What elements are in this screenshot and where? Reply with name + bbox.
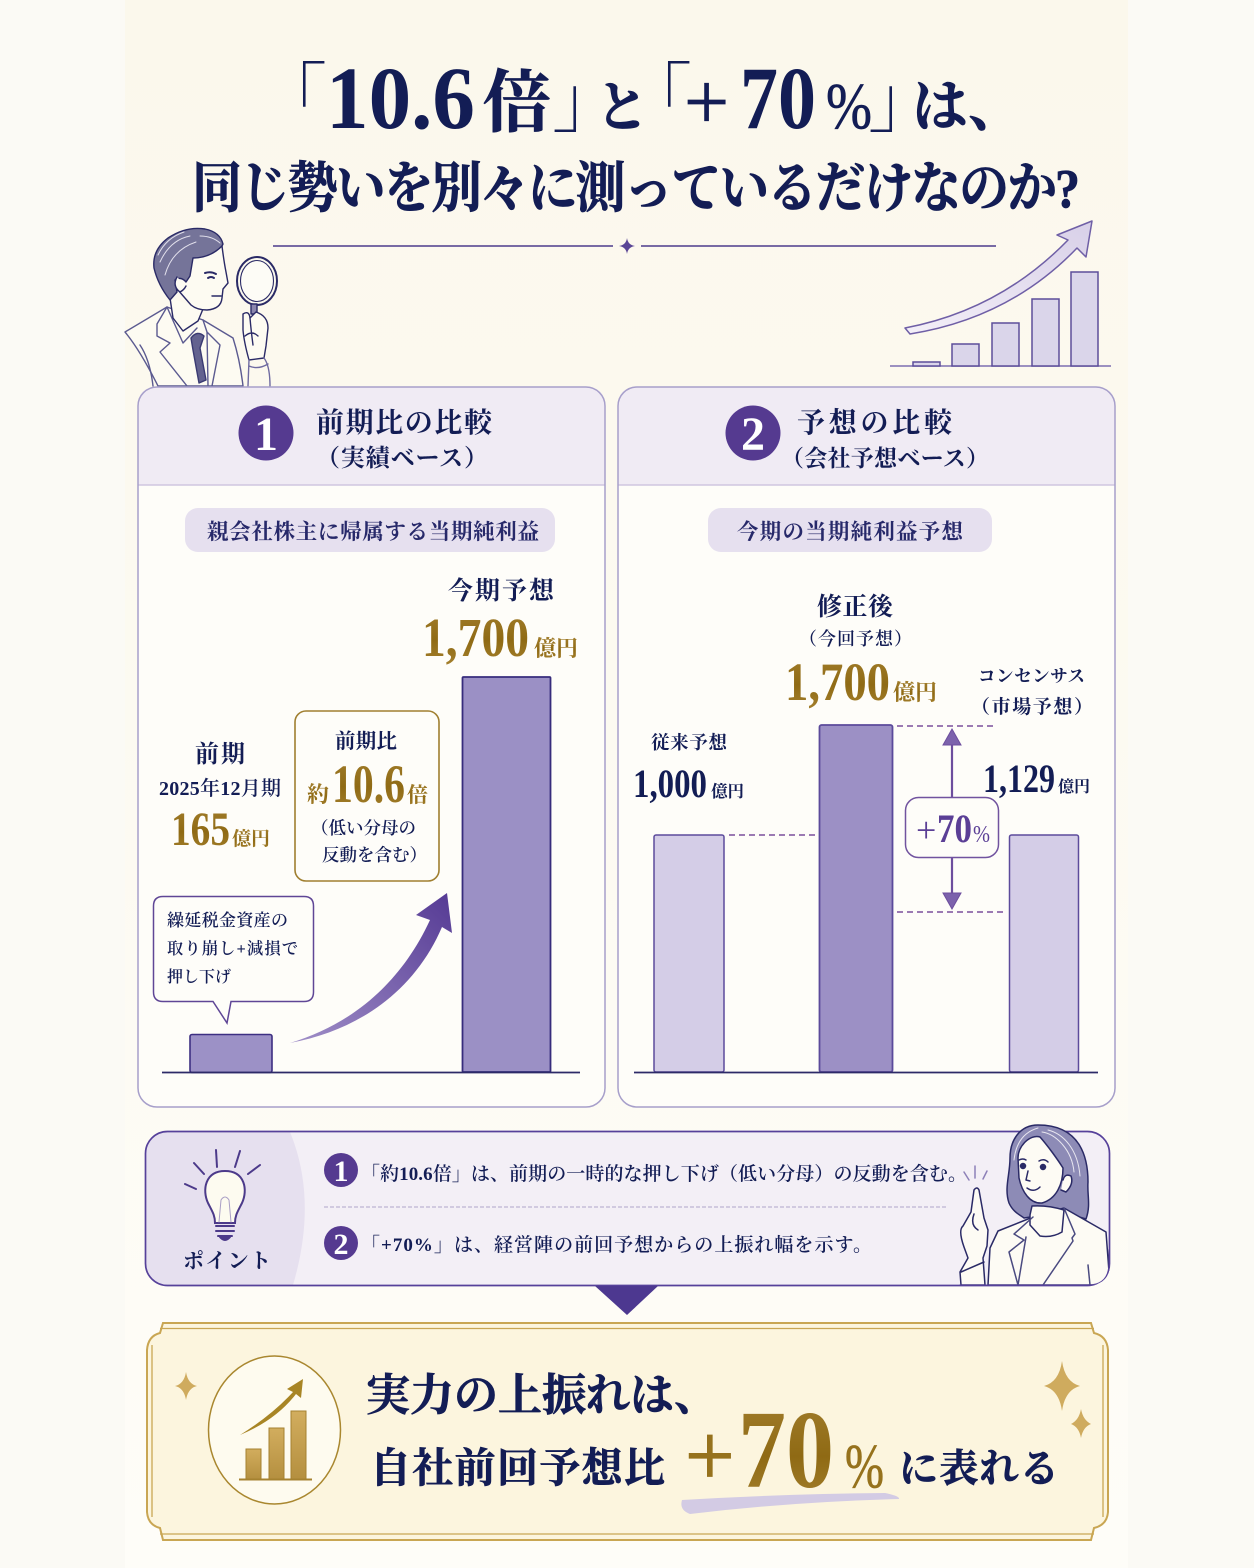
prior period label: 165 bbox=[171, 803, 230, 856]
prior period label: 2025年12月期 bbox=[159, 776, 281, 800]
point 1: 「約10.6倍」は、前期の一時的な押し下げ（低い分母）の反動を含む。 bbox=[361, 1163, 967, 1185]
label: revised forecast: 億円 bbox=[893, 680, 937, 705]
title: % bbox=[826, 70, 872, 143]
callout: deferred tax note: 繰延税金資産の bbox=[167, 911, 288, 930]
conclusion text: 実力の上振れは、 bbox=[366, 1371, 718, 1420]
point label with bulb: ポイント bbox=[183, 1249, 271, 1273]
callout: yoy multiple: 10.6 bbox=[332, 754, 405, 814]
label: consensus: 1,129 bbox=[983, 756, 1055, 801]
label: previous forecast: 1,000 bbox=[633, 761, 707, 806]
callout: deferred tax note: 押し下げ bbox=[167, 968, 231, 986]
panel 2 header: 予想の比較 bbox=[797, 406, 954, 439]
double arrow with +70%: % bbox=[973, 822, 990, 848]
illustration: rising bar chart with arrow bbox=[890, 221, 1111, 366]
sparkles bbox=[175, 1361, 1091, 1438]
callout: yoy multiple: （低い分母の bbox=[311, 818, 416, 838]
panel 1 metric label: 親会社株主に帰属する当期純利益 bbox=[207, 519, 539, 544]
panel 2 bar chart bbox=[634, 725, 1098, 1072]
label: revised forecast: 1,700 bbox=[785, 652, 890, 712]
point 1 bbox=[324, 1153, 967, 1188]
prior period label: 億円 bbox=[232, 828, 270, 850]
connector triangle bbox=[595, 1286, 658, 1315]
panel 2 header: 2 bbox=[741, 408, 765, 461]
arrow: growth bbox=[290, 893, 452, 1043]
title: 10.6 bbox=[326, 50, 475, 148]
title: 」 bbox=[868, 65, 938, 142]
callout: yoy multiple: 約 bbox=[307, 782, 329, 807]
point 2: 「+70%」は、経営陣の前回予想からの上振れ幅を示す。 bbox=[361, 1234, 872, 1256]
point 2: 2 bbox=[334, 1228, 348, 1261]
highlight: +70%: + bbox=[685, 1408, 735, 1505]
panel 1 header: （実績ベース） bbox=[316, 445, 488, 472]
panel 2 metric label: 今期の当期純利益予想 bbox=[737, 519, 964, 544]
point panel bbox=[146, 1125, 1110, 1286]
label: consensus: （市場予想） bbox=[971, 696, 1093, 718]
prior period label: 前期 bbox=[195, 741, 245, 768]
label: consensus: コンセンサス bbox=[978, 666, 1085, 686]
highlight: +70%: % bbox=[845, 1433, 884, 1501]
callout: yoy multiple: 倍 bbox=[407, 783, 428, 807]
double arrow with +70%: 70 bbox=[937, 806, 972, 851]
this period forecast label bbox=[422, 577, 578, 668]
panel 1 metric label bbox=[185, 508, 555, 552]
title: 「 bbox=[622, 59, 692, 136]
title: は、 bbox=[912, 77, 1024, 139]
title: 70 bbox=[740, 50, 816, 148]
illustration: man with magnifying glass bbox=[125, 228, 277, 386]
label: consensus bbox=[971, 666, 1093, 801]
callout: yoy multiple bbox=[295, 711, 439, 881]
double arrow with +70% bbox=[906, 729, 998, 909]
double arrow with +70%: + bbox=[916, 810, 936, 850]
label: revised forecast: 修正後 bbox=[817, 593, 894, 621]
comparison guide lines bbox=[729, 726, 1005, 912]
title: 「 bbox=[257, 59, 327, 136]
label: previous forecast: 従来予想 bbox=[651, 732, 728, 754]
panel 2: forecast comparison bbox=[618, 387, 1115, 1107]
title: 倍 bbox=[483, 65, 551, 141]
callout: yoy multiple: 前期比 bbox=[335, 730, 397, 753]
illustration: woman pointing bbox=[960, 1125, 1110, 1286]
title bbox=[192, 50, 1080, 220]
this period forecast label: 億円 bbox=[534, 636, 578, 661]
panel 2 header: （会社予想ベース） bbox=[781, 446, 989, 471]
panel 1: prior-period comparison bbox=[138, 387, 605, 1107]
panel 1 bar chart bbox=[162, 677, 580, 1072]
point 2 bbox=[324, 1226, 872, 1261]
title divider bbox=[273, 238, 996, 254]
conclusion text: 自社前回予想比 bbox=[370, 1445, 665, 1491]
panel 1 header: 前期比の比較 bbox=[316, 407, 494, 439]
panel 2 header bbox=[618, 387, 1115, 485]
highlight: +70%: 70 bbox=[738, 1389, 834, 1512]
conclusion panel bbox=[147, 1323, 1108, 1540]
this period forecast label: 1,700 bbox=[422, 607, 529, 668]
label: consensus: 億円 bbox=[1058, 777, 1090, 796]
prior period label bbox=[159, 741, 281, 856]
conclusion text bbox=[366, 1371, 1059, 1514]
icon: gold growth chart bbox=[208, 1356, 340, 1504]
title: 」 bbox=[552, 65, 622, 142]
this period forecast label: 今期予想 bbox=[448, 577, 556, 605]
label: revised forecast bbox=[785, 593, 937, 712]
panel 1 header bbox=[138, 387, 605, 485]
title: + bbox=[684, 59, 729, 147]
title: 同じ勢いを別々に測っているだけなのか? bbox=[192, 159, 1080, 220]
panel 2 metric label bbox=[708, 508, 992, 552]
label: revised forecast: （今回予想） bbox=[799, 628, 912, 649]
callout: deferred tax note: 取り崩し+減損で bbox=[167, 939, 298, 958]
conclusion frame bbox=[147, 1323, 1108, 1540]
callout: yoy multiple: 反動を含む） bbox=[322, 845, 427, 865]
highlight: +70% bbox=[681, 1389, 899, 1514]
title: と bbox=[595, 78, 649, 138]
conclusion text: に表れる bbox=[899, 1448, 1059, 1491]
panel 1 header: 1 bbox=[254, 408, 278, 461]
label: previous forecast bbox=[633, 732, 744, 806]
point 1: 1 bbox=[334, 1155, 348, 1188]
label: previous forecast: 億円 bbox=[711, 781, 744, 801]
callout: deferred tax note bbox=[154, 896, 314, 1023]
point label with bulb bbox=[146, 1132, 305, 1285]
